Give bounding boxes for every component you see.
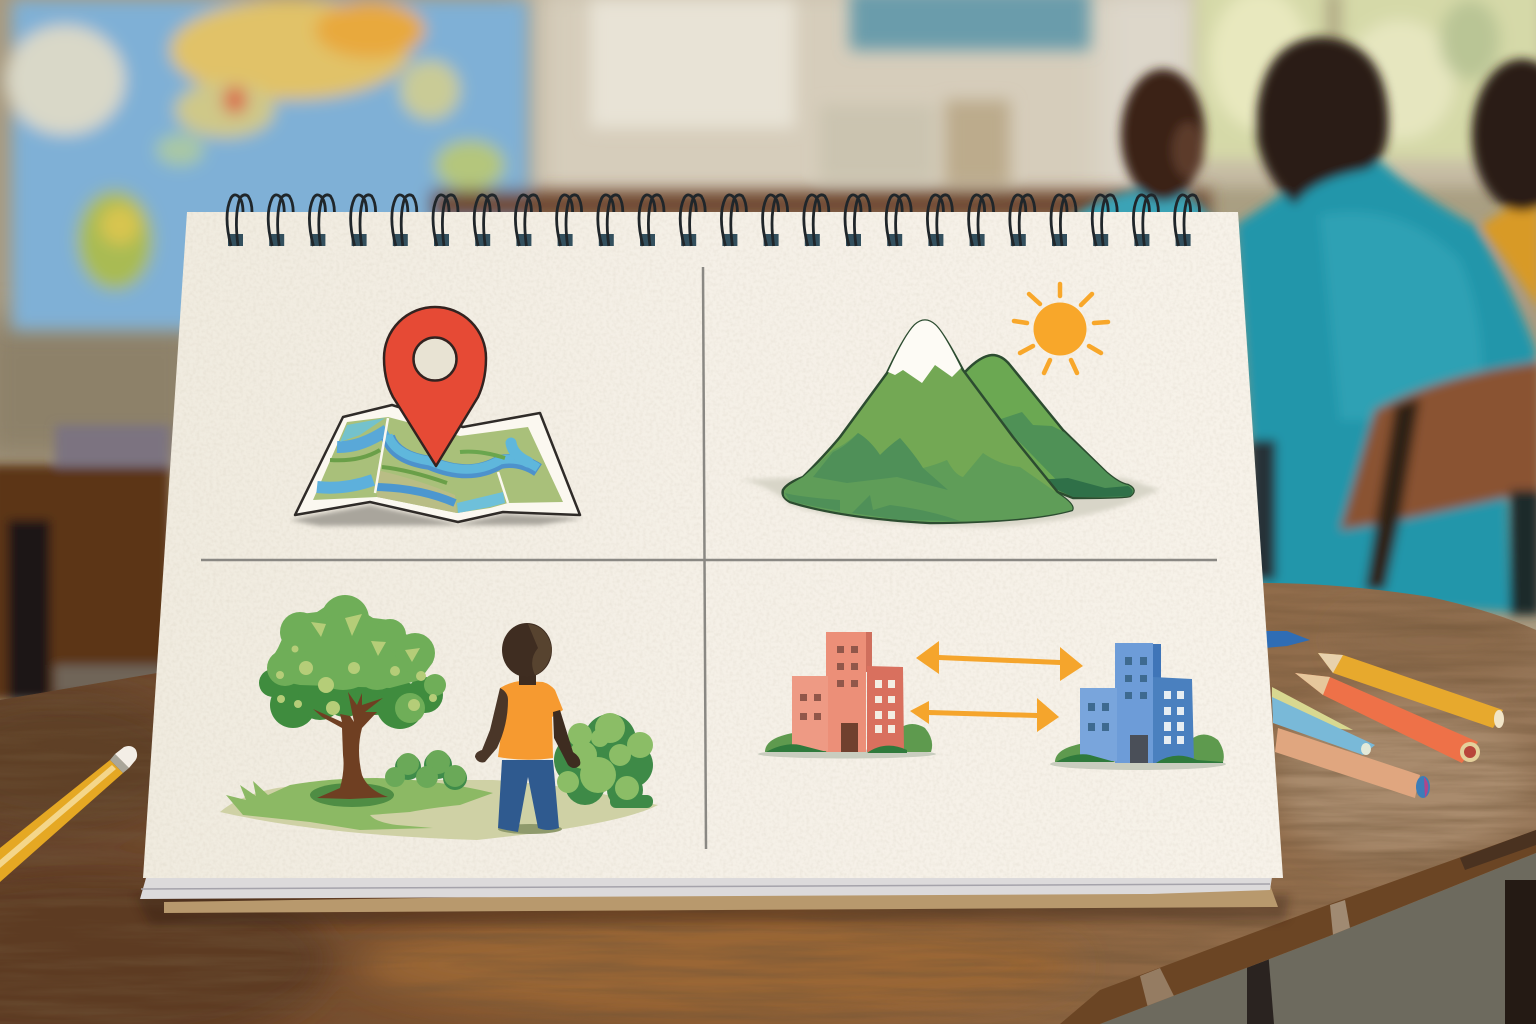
panel: child observing tree and bushes bbox=[220, 595, 658, 840]
pencil: yellow left bbox=[0, 746, 137, 882]
icon: location pin bbox=[384, 307, 486, 466]
icon: sun bbox=[1014, 284, 1108, 373]
floor and legs below table bbox=[1080, 820, 1536, 1024]
blurred students bbox=[1075, 37, 1536, 615]
flip chart notebook bbox=[135, 195, 1290, 925]
icon: pink city bbox=[758, 632, 936, 758]
arrow: lower two-way bbox=[910, 698, 1059, 732]
panel: map with location pin bbox=[290, 307, 583, 526]
orange pencil bbox=[1295, 673, 1480, 763]
icon: main mountain bbox=[783, 320, 1072, 523]
wooden table bbox=[0, 570, 1536, 1024]
paper page bbox=[140, 212, 1286, 880]
pencils on right of notebook bbox=[1265, 631, 1504, 798]
notebook shadow and base bbox=[135, 877, 1290, 925]
blurred desk left bbox=[0, 425, 170, 700]
table top bbox=[0, 570, 1536, 1024]
icon: tree bbox=[259, 595, 446, 799]
spiral rings bbox=[227, 195, 1200, 246]
arrow: upper two-way bbox=[916, 641, 1083, 681]
panel: mountains and sun bbox=[737, 284, 1160, 527]
icon: small bush bbox=[385, 750, 467, 790]
icon: big bush bbox=[554, 713, 653, 808]
map shadow bbox=[290, 505, 583, 526]
icon: back mountain bbox=[965, 355, 1134, 498]
light-blue pencil bbox=[1272, 697, 1375, 755]
icon: folded map bbox=[295, 405, 580, 522]
blurred classroom background bbox=[0, 0, 1536, 720]
peach pencil bbox=[1275, 728, 1430, 798]
panel dividers bbox=[703, 267, 706, 849]
panel: two cities linked by arrows bbox=[758, 632, 1226, 770]
blue pencil tip bbox=[1265, 631, 1310, 648]
icon: child figure bbox=[475, 623, 580, 834]
mountain shadow bbox=[737, 478, 1160, 527]
yellow pencil bbox=[1318, 653, 1504, 728]
icon: blue city bbox=[1050, 643, 1226, 770]
yellow-green pencil bbox=[1272, 687, 1353, 730]
ground bbox=[220, 780, 658, 840]
